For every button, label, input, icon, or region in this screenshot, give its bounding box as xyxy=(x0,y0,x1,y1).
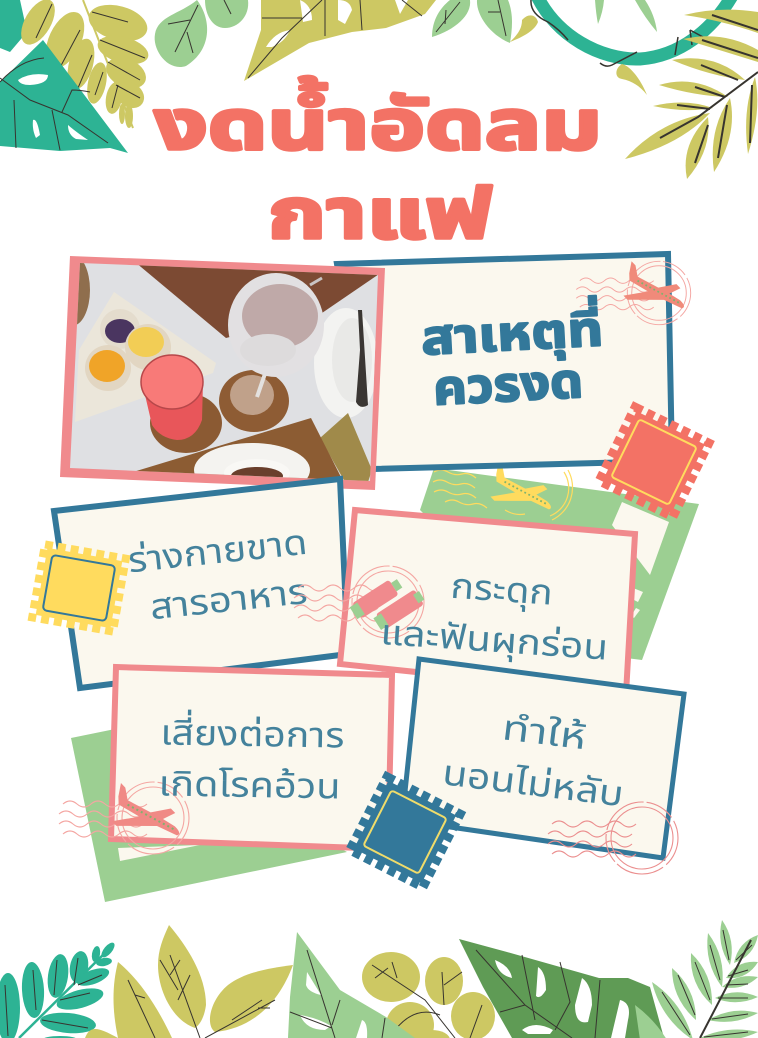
teal monstera leaf xyxy=(0,40,128,153)
heading text xyxy=(419,295,604,416)
title line 2: กาแฟ xyxy=(268,175,492,253)
card: bones and teeth xyxy=(294,510,635,694)
stamp: yellow xyxy=(32,544,126,632)
right olive palm frond xyxy=(625,10,758,179)
olive monstera leaf xyxy=(244,0,436,81)
top foliage border xyxy=(0,0,758,179)
postmark: binoculars xyxy=(294,566,427,639)
green background sheet: upper right xyxy=(420,461,699,660)
postmark: plane xyxy=(576,260,692,325)
small green leaves xyxy=(432,0,657,43)
card text xyxy=(158,708,345,807)
postmark xyxy=(548,802,678,874)
card: insomnia xyxy=(402,659,684,874)
postmark: plane xyxy=(59,782,189,854)
olive leaves xyxy=(85,925,293,1038)
olive compound leaf xyxy=(14,0,151,128)
card text: ทำให้ xyxy=(500,708,588,757)
card text: และฟันผุกร่อน xyxy=(379,613,609,669)
teal corner leaf xyxy=(0,0,27,52)
card text: กระดุก xyxy=(449,567,554,614)
card text: เสี่ยงต่อการ xyxy=(160,708,345,756)
card text: สารอาหาร xyxy=(148,572,309,627)
light green monstera xyxy=(288,932,415,1038)
teal vine ring xyxy=(531,0,732,66)
dark green monstera xyxy=(459,939,667,1038)
photo frame xyxy=(54,254,390,497)
small olive leaf under ring xyxy=(616,64,647,95)
card text: เกิดโรคอ้วน xyxy=(158,764,341,807)
card text xyxy=(379,562,613,669)
card text: ร่างกายขาด xyxy=(126,523,309,580)
green palm frond xyxy=(652,920,758,1038)
card: heading xyxy=(337,254,692,469)
title line 1: งดน้ำอัดลม xyxy=(154,76,602,164)
olive round leaves xyxy=(362,952,495,1038)
stamp: blue xyxy=(350,777,460,887)
green background sheet: lower left xyxy=(71,728,347,902)
stamp: red xyxy=(599,407,709,517)
heading text: สาเหตุที่ xyxy=(419,295,604,368)
title xyxy=(154,76,602,253)
bottom foliage border xyxy=(0,920,758,1038)
heading text: ควรงด xyxy=(432,355,584,416)
card text xyxy=(440,702,632,814)
card text: นอนไม่หลับ xyxy=(440,753,626,814)
photo: drinks and table xyxy=(70,263,378,481)
card text xyxy=(126,523,314,629)
yellow postmark xyxy=(433,461,573,526)
card: obesity risk xyxy=(59,667,392,854)
teal fern xyxy=(0,941,117,1038)
light green round leaves xyxy=(155,0,248,67)
card: nutrient deficiency xyxy=(54,479,348,688)
